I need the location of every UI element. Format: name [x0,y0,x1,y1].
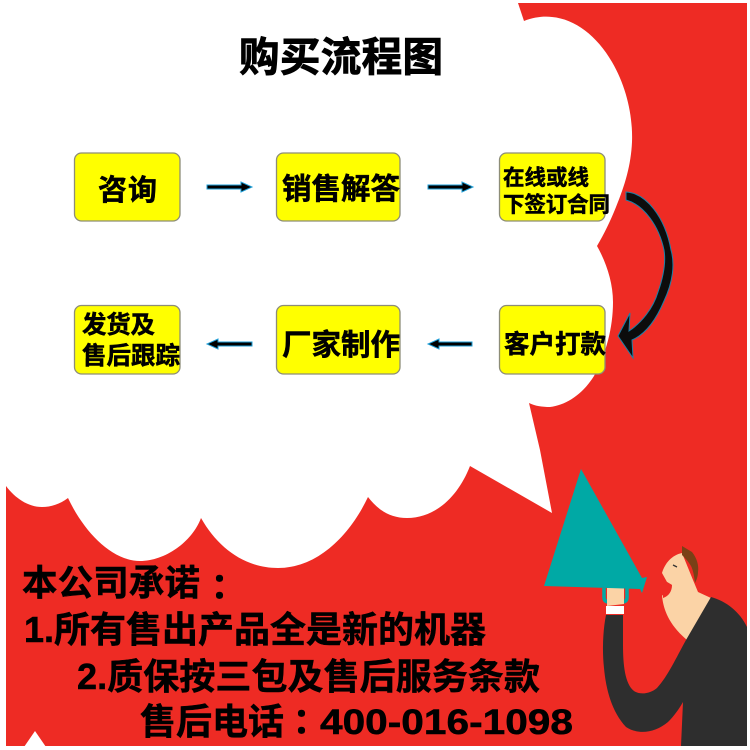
step: 客户打款: 客户打款 [504,330,606,359]
arrow: step 4 to step 5 [428,339,472,349]
text block: company promise: 2.质保按三包及售后服务条款 [77,656,540,697]
title: 购买流程图 [239,34,443,80]
hand [607,588,624,606]
step: 发货及售后跟踪 [74,306,180,374]
megaphone handle [604,588,627,602]
text block: company promise: ： [284,704,319,743]
step: 在线或线下签订合同 [500,153,610,221]
text block: company promise: 1.所有售出产品全是新的机器 [24,609,486,650]
text block: company promise: ： [202,569,237,608]
step: 销售解答 [276,153,400,221]
black suit [603,597,747,746]
text block: company promise: 本公司承诺 [22,563,200,603]
step: 发货及售后跟踪: 售后跟踪 [82,342,180,370]
hair [682,546,698,583]
icon: white notch at bottom edge [24,731,46,747]
text block: company promise: 400-016-1098 [320,703,573,742]
shirt cuff [606,606,624,614]
arrow: curved from step 3 to step 4 [618,192,673,358]
mouth [663,582,672,598]
megaphone [544,469,647,593]
icon: man with megaphone [544,469,747,746]
arrow: step 2 to step 3 [428,182,473,192]
step: 在线或线下签订合同: 下签订合同 [503,193,610,217]
step: 厂家制作 [276,306,400,374]
eye [673,565,677,567]
step: 客户打款 [500,306,606,374]
face and neck [662,553,711,640]
step: 发货及售后跟踪: 发货及 [82,311,155,339]
arrow: step 1 to step 2 [207,182,252,192]
step: 厂家制作: 厂家制作 [282,329,400,362]
step: 咨询: 咨询 [98,174,157,207]
text block: company promise: 售后电话 [140,701,284,742]
step: 咨询 [74,153,180,221]
text block: company promise [22,563,573,743]
step: 在线或线下签订合同: 在线或线 [503,166,589,190]
step: 销售解答: 销售解答 [282,173,400,206]
arrow: step 5 to step 6 [207,339,252,349]
